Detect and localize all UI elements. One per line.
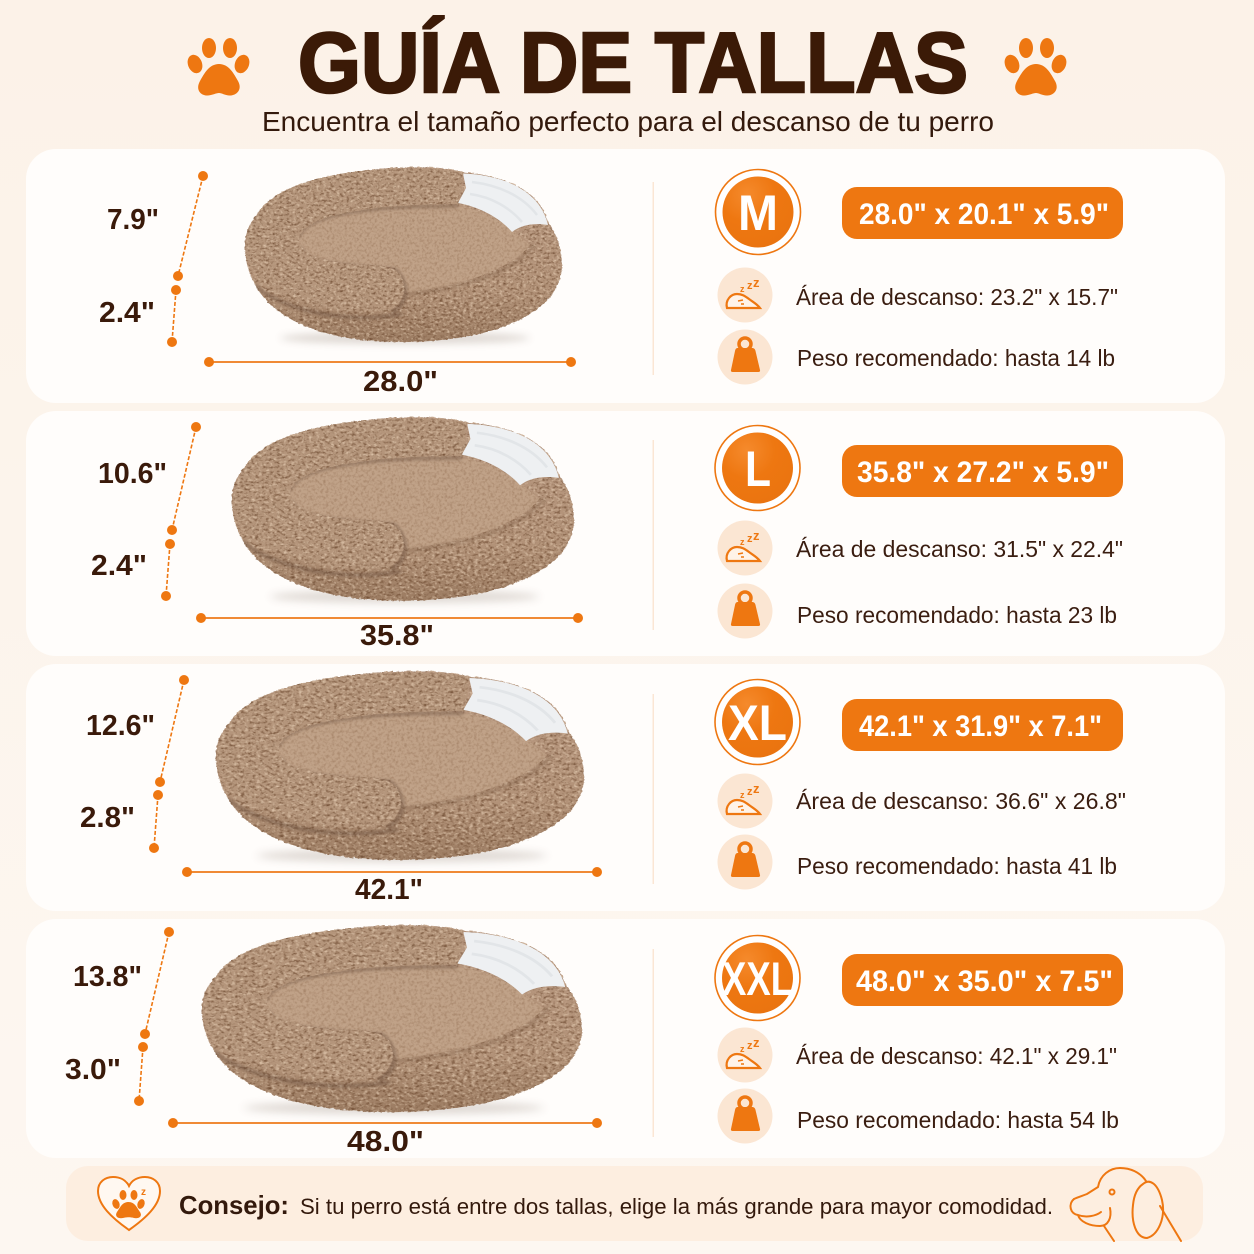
icon: sleep M [718,268,772,322]
pill: dimensions L [842,445,1123,497]
dimension: width 48.0 [168,1118,602,1158]
bed L [232,417,574,603]
icon: sleep XL [718,774,772,828]
pill: dimensions XXL: 48.0" x 35.0" x 7.5" [856,965,1113,998]
text: rest area L: Área de descanso: 31.5" x 22.4" [796,536,1123,562]
pill: dimensions XL: 42.1" x 31.9" x 7.1" [859,710,1102,743]
dimension: width 35.8 [196,613,583,652]
text: weight M: Peso recomendado: hasta 14 lb [797,345,1115,371]
panel: size M [26,149,1225,403]
icon: sleep XL: z [753,781,760,796]
dimension: height 12.6 [86,675,189,787]
icon: right paw [1002,38,1069,96]
icon: weight M [718,330,772,384]
icon: sleep M: z [753,275,760,290]
tip label: Consejo: [179,1190,289,1220]
icon: weight L [718,584,772,638]
icon: weight XXL [718,1088,772,1144]
text: weight XXL: Peso recomendado: hasta 54 lb [797,1107,1119,1133]
dimension: height 2.4: 2.4" [91,550,147,582]
dimension: height 7.9 [107,171,208,281]
icon: sleep M: z [747,280,753,292]
dimension: height 3.0 [65,1042,148,1106]
panel: size XL [26,664,1225,911]
dimension: width 35.8: 35.8" [360,620,434,652]
text: rest area XXL: Área de descanso: 42.1" x 29.1" [796,1043,1117,1069]
icon: weight XL [718,834,772,890]
badge L: L [745,441,771,497]
pill: dimensions M: 28.0" x 20.1" x 5.9" [859,198,1109,231]
icon: sleep XXL: z [740,1044,745,1054]
pill: dimensions L: 35.8" x 27.2" x 5.9" [857,456,1109,489]
dimension: height 2.4: 2.4" [99,297,155,329]
dimension: width 42.1 [182,867,602,906]
icon: sleep M: z [740,284,745,294]
icon: sleep L: z [753,528,760,543]
dimension: height 10.6 [98,422,201,535]
panel: tip [66,1166,1203,1241]
badge M [716,170,800,254]
text: rest area XL: Área de descanso: 36.6" x 26.8" [796,788,1126,814]
icon: sleep XL: z [747,786,753,798]
icon: sleep L: z [747,533,753,545]
dimension: height 10.6: 10.6" [98,458,167,490]
dimension: height 7.9: 7.9" [107,204,159,236]
icon: dog outline [1071,1168,1181,1241]
text: rest area M: Área de descanso: 23.2" x 15.7" [796,284,1118,310]
title: GUÍA DE TALLAS [298,16,968,111]
dimension: height 3.0: 3.0" [65,1054,121,1086]
dimension: height 13.8 [73,927,174,1039]
icon: sleep XL: z [740,790,745,800]
dimension: width 28.0: 28.0" [363,366,438,398]
icon: heart with paw [98,1177,160,1230]
dimension: height 2.8 [80,790,163,853]
dimension: height 2.4 [99,285,181,347]
badge L [715,426,800,510]
icon: sleep L [718,520,772,576]
icon: sleep XXL: z [753,1035,760,1050]
dimension: height 12.6: 12.6" [86,710,155,742]
badge M: M [738,185,778,241]
icon: sleep L: z [740,537,745,547]
pill: dimensions XL [842,699,1123,751]
badge XL [715,680,800,764]
icon: sleep XXL [718,1028,772,1082]
badge XXL: XXL [722,952,793,1005]
panel: size L [26,411,1225,656]
dimension: height 2.4 [91,539,175,601]
pill: dimensions XXL [842,954,1123,1006]
bed M [245,167,562,344]
bed XL [216,671,584,862]
badge XL: XL [728,695,787,751]
text: weight L: Peso recomendado: hasta 23 lb [797,602,1117,628]
icon: left paw [185,38,252,96]
tip text: Si tu perro está entre dos tallas, elige la más grande para mayor comodidad. [300,1194,1053,1219]
pill: dimensions M [842,187,1123,239]
subtitle: Encuentra el tamaño perfecto para el descanso de tu perro [262,106,994,137]
dimension: width 48.0: 48.0" [347,1126,424,1158]
dimension: width 42.1: 42.1" [355,874,423,906]
bed XXL [202,925,582,1114]
dimension: width 28.0 [204,357,576,398]
text: weight XL: Peso recomendado: hasta 41 lb [797,853,1117,879]
icon: sleep XXL: z [747,1040,753,1052]
panel: size XXL [26,919,1225,1158]
dimension: height 2.8: 2.8" [80,802,135,834]
icon: heart with paw: z [141,1187,146,1198]
dimension: height 13.8: 13.8" [73,961,142,993]
badge XXL [715,936,800,1020]
